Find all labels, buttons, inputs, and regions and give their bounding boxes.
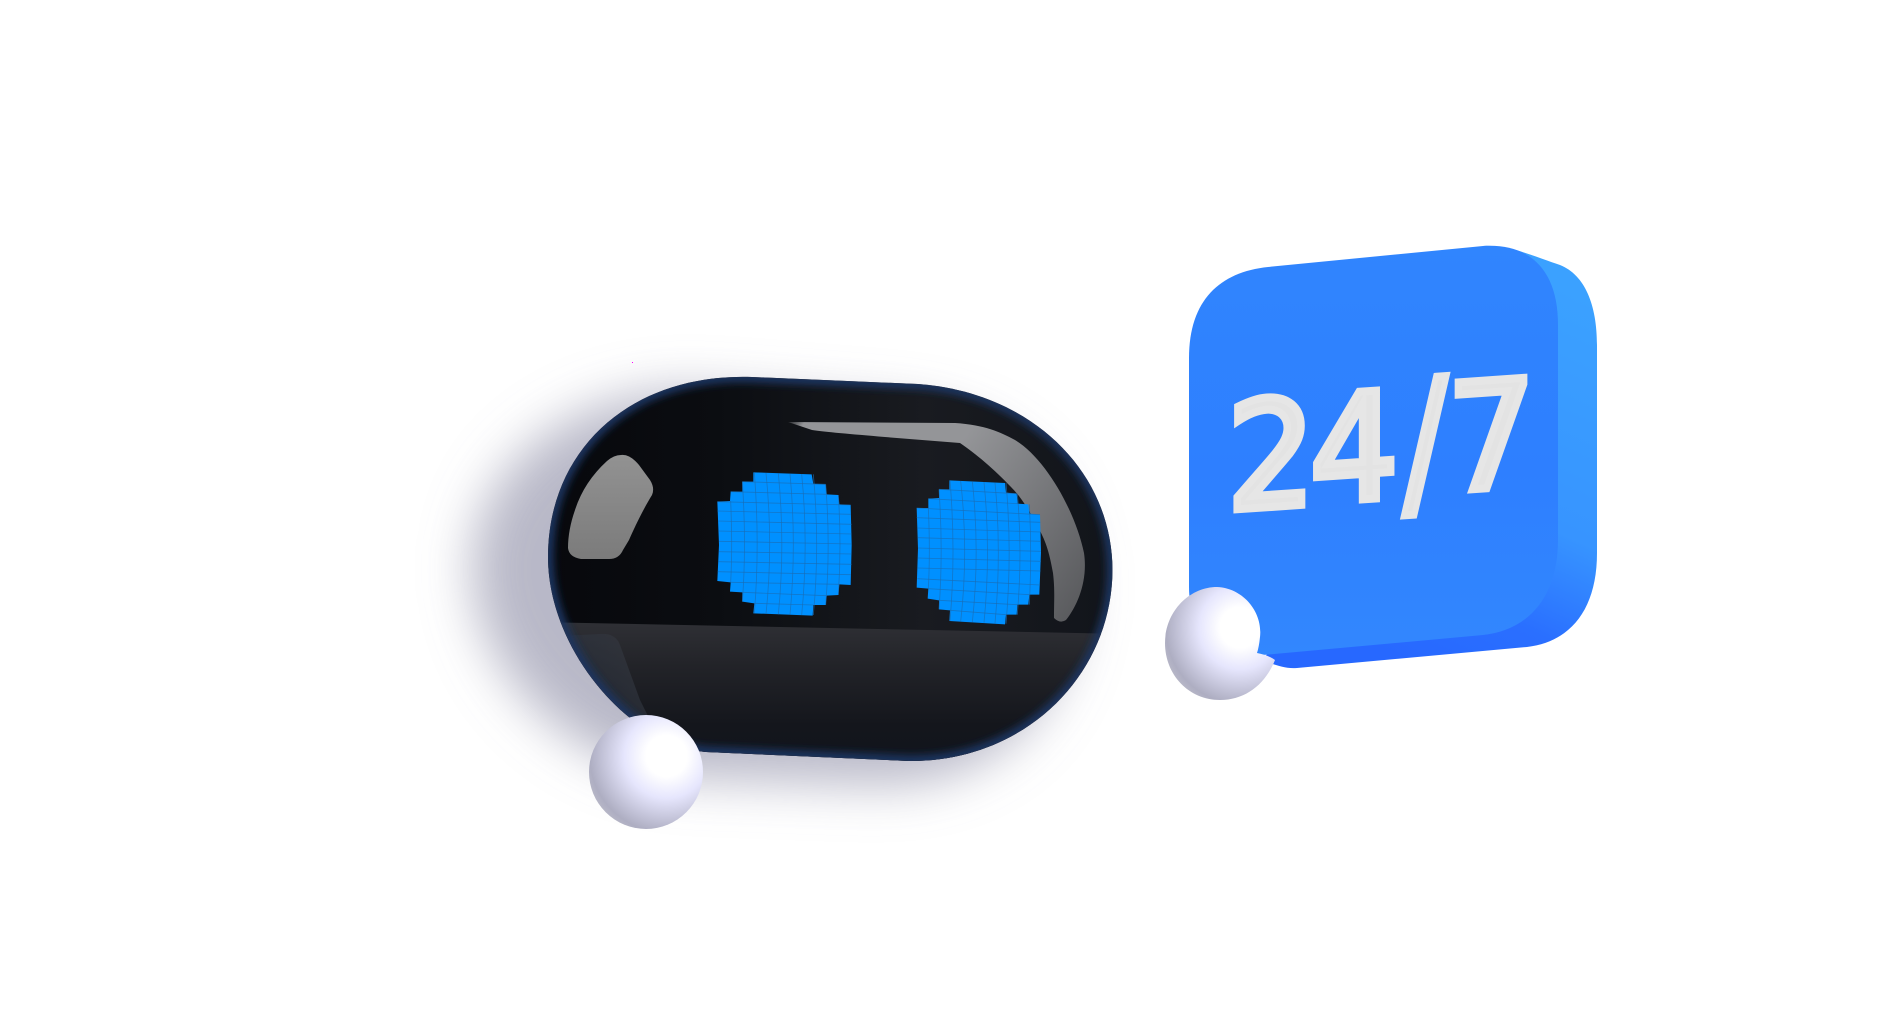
white sphere on card (1165, 587, 1275, 700)
right highlight (788, 422, 1085, 622)
card front face (1189, 246, 1558, 655)
lower left reflection (578, 634, 648, 716)
24/7 text: 2 (1227, 367, 1316, 545)
white sphere on robot head (589, 715, 703, 829)
lower reflective band (560, 622, 1101, 761)
navy rim glow (548, 377, 1112, 761)
24/7 text: / (1404, 344, 1447, 540)
robot head (535, 370, 1130, 770)
right eye (917, 480, 1041, 624)
24/7 text: 7 (1447, 348, 1536, 526)
shadow behind robot head (472, 392, 1078, 785)
24/7 text (1227, 344, 1536, 545)
card side faces (1262, 246, 1597, 668)
24/7 text: 4 (1310, 360, 1399, 538)
blue 24/7 card (1189, 246, 1597, 668)
stray magenta pixel (632, 362, 633, 363)
left highlight (568, 455, 653, 559)
left eye (717, 472, 852, 616)
